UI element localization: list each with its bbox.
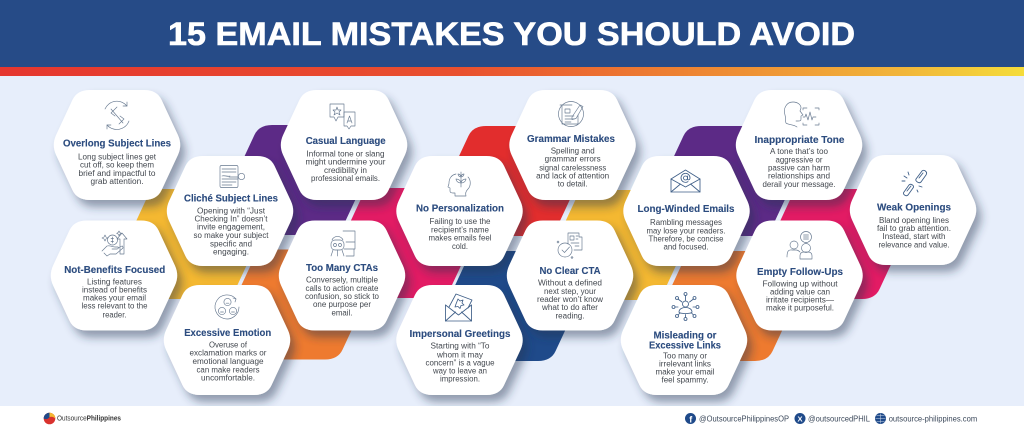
description (656, 352, 715, 385)
description: one purpose per (313, 300, 371, 309)
description: feel spammy. (662, 376, 708, 385)
ribbon: yellow right (557, 190, 683, 300)
card: Grammar Mistakes (509, 90, 636, 200)
description: Spelling and (551, 146, 595, 155)
description: makes emails feel (428, 234, 492, 243)
description: confusion, so stick to (305, 292, 380, 301)
description (426, 341, 495, 383)
description: aggressive or (776, 155, 823, 164)
description: and lack of attention (536, 171, 609, 180)
icon: translation bubbles (330, 104, 355, 129)
icon: document and pen (558, 102, 584, 126)
heading: Long-Winded Emails (638, 204, 735, 215)
description: way to leave an (432, 366, 487, 375)
description: Checking In” doesn’t (194, 215, 268, 224)
description: engaging. (213, 247, 249, 256)
ribbon: magenta right (772, 189, 898, 299)
icon: head with plant (448, 172, 470, 196)
ribbon: magenta left (343, 188, 469, 298)
icon: speaking head with waveform (784, 102, 819, 127)
description: Overuse of (209, 340, 248, 349)
description: Following up without (762, 279, 838, 288)
card: Inappropriate Tone (736, 90, 862, 200)
heading: Cliché Subject Lines (184, 194, 279, 204)
description: specific and (210, 239, 252, 248)
description: Without a defined (538, 278, 602, 287)
heading: Impersonal Greetings (410, 329, 511, 340)
description: Listing features (87, 277, 142, 286)
description: can make readers (196, 365, 260, 374)
ribbon: orange right (665, 251, 791, 361)
description: impression. (440, 374, 480, 383)
ribbon: red (450, 126, 576, 236)
logo (44, 413, 121, 424)
description: cut off, so keep them (80, 161, 154, 170)
description (194, 206, 269, 256)
heading: Excessive Links (649, 340, 722, 352)
description: professional emails. (311, 174, 380, 183)
description: uncomfortable. (201, 373, 255, 382)
card: No Clear CTA (507, 220, 633, 330)
description: A tone that’s too (770, 147, 829, 156)
heading (649, 330, 722, 352)
description: what to do after (541, 303, 598, 312)
description (305, 276, 380, 318)
description: concern” is a vague (426, 358, 495, 367)
heading: Too Many CTAs (306, 263, 379, 274)
description: so make your subject (194, 231, 269, 240)
description: Informal tone or slang (306, 149, 384, 158)
card: Excessive Emotion (164, 285, 290, 395)
card: Long-Winded Emails (623, 156, 750, 266)
description: reader won’t know (537, 295, 603, 304)
logo wordmark: OutsourcePhilippines (57, 414, 121, 422)
description (82, 277, 148, 319)
heading: Empty Follow-Ups (757, 267, 844, 278)
description: Too many or (663, 352, 707, 361)
description: grammar errors (545, 154, 601, 163)
description: Instead, start with (882, 232, 946, 241)
description: signal carelessness (539, 163, 606, 172)
description: instead of benefits (82, 286, 147, 295)
description: Conversely, multiple (306, 276, 379, 285)
description: Rambling messages (650, 218, 722, 227)
icon: open envelope with letter (446, 294, 472, 321)
description: might undermine your (306, 158, 386, 167)
ribbon: yellow left (128, 189, 254, 299)
gradient stripe (0, 67, 1024, 76)
description: reader. (102, 310, 126, 319)
description: invite engagement, (197, 223, 265, 232)
heading: Not-Benefits Focused (64, 265, 165, 276)
description: derail your message. (762, 180, 836, 189)
ribbon: purple right (665, 126, 791, 236)
icon: two people with speech bubble (787, 232, 812, 259)
icon: document with key (220, 166, 245, 188)
logo mark (44, 413, 55, 424)
social: website: outsource-philippines.com (889, 414, 978, 424)
description: makes your email (83, 294, 146, 303)
description: reading. (556, 311, 584, 320)
icon: hand with coin (102, 231, 127, 256)
description: irritate recipients— (766, 295, 834, 304)
card: Too Many CTAs (279, 220, 405, 330)
card: Cliche Subject Lines (167, 156, 293, 266)
heading: Inappropriate Tone (754, 135, 845, 146)
description: may lose your readers. (646, 226, 726, 235)
heading: Misleading or (654, 330, 717, 342)
icon: document and check mark (557, 233, 582, 258)
card: Impersonal Greetings (396, 285, 523, 395)
card: Not-Benefits Focused (51, 220, 177, 330)
description: Bland opening lines (879, 216, 949, 225)
page background (0, 76, 1024, 406)
description: emotional language (192, 357, 264, 366)
description: next step, your (544, 287, 596, 296)
heading: Grammar Mistakes (527, 134, 616, 145)
heading: Weak Openings (877, 202, 952, 214)
description: credibility in (324, 166, 367, 175)
card: Misleading or Excessive Links (621, 285, 747, 395)
heading: Overlong Subject Lines (63, 138, 172, 150)
heading: Excessive Emotion (184, 328, 271, 339)
description: irrelevant links (659, 360, 711, 369)
heading: No Clear CTA (540, 266, 600, 277)
description: email. (332, 309, 352, 318)
icon: circle of emotion faces (215, 295, 239, 319)
card: Overlong Subject Lines (54, 90, 180, 200)
card: Empty Follow-Ups (736, 220, 863, 330)
description: Long subject lines get (78, 152, 157, 161)
card: Casual Language (281, 90, 407, 200)
icon: robot with chat bubbles (331, 231, 355, 256)
social: Facebook (685, 413, 789, 424)
description: relevance and value. (878, 240, 950, 249)
description (306, 149, 386, 183)
card: Weak Openings (850, 155, 976, 265)
description (536, 146, 609, 188)
description: cold. (452, 242, 468, 251)
description: make your email (656, 368, 715, 377)
ribbon: orange left (235, 250, 361, 360)
description (190, 340, 267, 382)
description: brief and impactful to (78, 169, 156, 178)
description: calls to action create (306, 284, 379, 293)
description (428, 217, 492, 251)
description: Starting with “To (430, 341, 490, 350)
description: less relevant to the (82, 302, 148, 311)
heading: Casual Language (306, 136, 386, 147)
card: No Personalization (396, 156, 523, 266)
description: relationships and (768, 172, 830, 181)
icon: envelope with at sign (671, 170, 700, 192)
description: and focused. (664, 242, 708, 251)
social: X: @outsourcedPHIL (808, 414, 871, 424)
description: to detail. (558, 179, 588, 188)
social: Facebook: @OutsourcePhilippinesOP (699, 414, 789, 424)
header band (0, 0, 1024, 67)
description: grab attention. (90, 177, 144, 186)
icon: hourglass with arrows (105, 101, 129, 129)
description: make it purposeful. (766, 304, 834, 313)
description: whom it may (436, 350, 483, 359)
social: X (794, 413, 871, 424)
icon: broken chain (902, 170, 927, 196)
description: adding value can (770, 288, 830, 297)
description: passive can harm (768, 164, 830, 173)
description (646, 218, 726, 251)
ribbon: purple left (236, 125, 362, 235)
description: fail to grab attention. (877, 224, 951, 233)
description: Therefore, be concise (648, 234, 724, 243)
description (537, 278, 603, 320)
description: exclamation marks or (190, 348, 267, 357)
description (877, 216, 951, 249)
description: Opening with “Just (197, 206, 266, 215)
footer band (0, 406, 1024, 431)
description: recipient’s name (431, 225, 490, 234)
description: Failing to use the (430, 217, 491, 226)
social: X: X (797, 414, 803, 423)
heading: No Personalization (416, 204, 504, 214)
icon: person with link nodes (672, 292, 699, 320)
title: 15 EMAIL MISTAKES YOU SHOULD AVOID (168, 16, 855, 52)
social: Facebook: f (689, 414, 693, 424)
description (762, 147, 836, 189)
social: website (875, 413, 978, 424)
ribbon: blue (448, 251, 574, 361)
description (762, 279, 838, 313)
description (78, 152, 157, 186)
